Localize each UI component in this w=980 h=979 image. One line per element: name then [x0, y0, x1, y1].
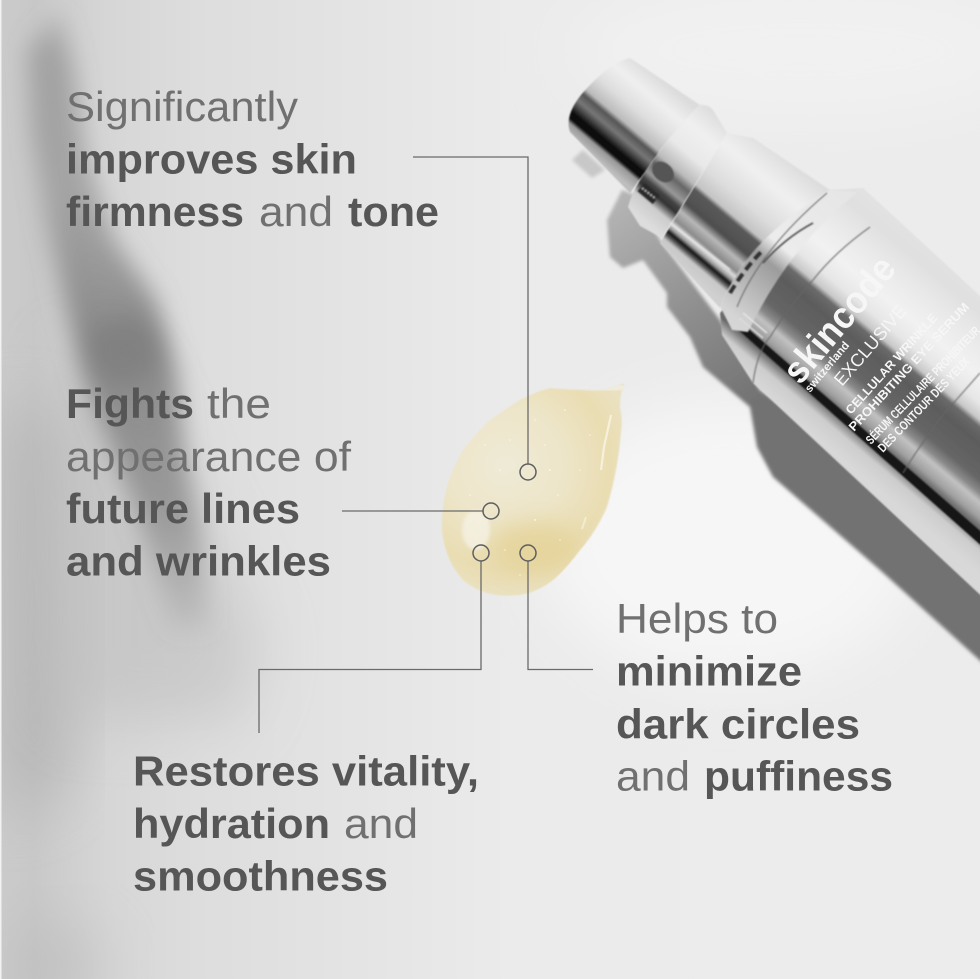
text block: future lines and wrinkles — [66, 380, 351, 584]
callout: dark circles leader — [520, 545, 593, 670]
bottle mid section — [660, 133, 830, 308]
bottle pump cap — [569, 58, 700, 193]
text block: firmness and tone: and — [259, 188, 333, 235]
text block: dark circles and puffiness: and — [616, 752, 690, 800]
text block: dark circles and puffiness: Helps to — [616, 595, 778, 642]
bottle second collar — [720, 190, 858, 332]
callout: firmness leader — [413, 157, 536, 480]
text block: firmness and tone: firmness — [66, 188, 244, 235]
text block: future lines and wrinkles: future lines — [66, 485, 300, 532]
text block: dark circles and puffiness — [616, 595, 893, 800]
text block: vitality, hydration, smoothness: and — [344, 800, 418, 847]
bottle reflections and seams — [637, 157, 980, 473]
bottle label text: PROHIBITING EYE SERUM — [846, 300, 972, 434]
callout: vitality leader — [259, 545, 489, 733]
text block: vitality, hydration, smoothness: Restores vitality, — [133, 748, 479, 794]
bottle main body — [720, 188, 980, 604]
text block: future lines and wrinkles: Fights — [66, 380, 194, 427]
callout: future lines leader — [342, 503, 499, 519]
text block: firmness and tone: improves skin — [66, 136, 357, 182]
product: serum bottle — [569, 58, 980, 604]
text block: future lines and wrinkles: appearance of — [66, 433, 351, 480]
text block: firmness and tone — [66, 83, 439, 235]
text block: vitality, hydration, smoothness — [133, 748, 479, 900]
bottle label text: CELLULAR WRINKLE — [843, 311, 940, 417]
text block: future lines and wrinkles: and wrinkles — [66, 538, 331, 584]
serum drop — [442, 383, 625, 596]
bottle label text — [775, 248, 980, 455]
bottle black reflection stripe — [734, 319, 980, 549]
text block: firmness and tone: Significantly — [66, 83, 298, 130]
bottle label text: EXCLUSIVE — [830, 301, 911, 390]
text block: vitality, hydration, smoothness: smoothness — [133, 852, 388, 900]
text block: vitality, hydration, smoothness: hydration — [133, 800, 330, 847]
text block: dark circles and puffiness: puffiness — [704, 752, 893, 800]
bottle label text: switzerland — [803, 340, 852, 395]
bottle first collar — [628, 105, 727, 238]
text block: dark circles and puffiness: dark circles — [616, 700, 860, 748]
bottle shadow — [572, 150, 980, 665]
text block: firmness and tone: tone — [348, 188, 439, 235]
text block: future lines and wrinkles: the — [207, 380, 271, 427]
bottle label text: skincode — [775, 248, 905, 392]
text block: dark circles and puffiness: minimize — [616, 648, 802, 694]
